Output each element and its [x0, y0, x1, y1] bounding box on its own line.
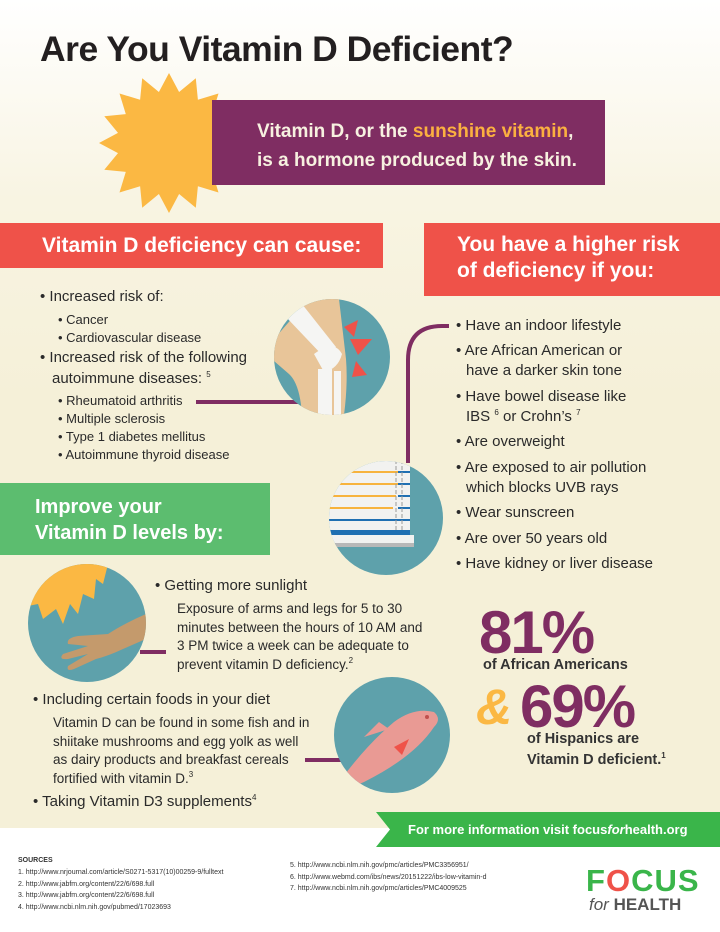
list: risk factors: • Wear sunscreen — [456, 504, 574, 521]
sources: 6. http://www.webmd.com/ibs/news/20151222/ibs-low-vitamin-d — [290, 874, 486, 880]
list: causes: • Rheumatoid arthritis — [58, 393, 182, 408]
banner: more info — [376, 812, 720, 847]
purple intro box: Vitamin D, or the sunshine vitamin, — [257, 121, 573, 142]
text: sunlight: • Getting more sunlight — [155, 577, 307, 594]
text: foods: Vitamin D can be found in some fish and in — [53, 715, 309, 730]
text: sunlight: prevent vitamin D deficiency.2 — [177, 656, 353, 672]
list: causes — [40, 288, 247, 462]
text: foods — [33, 691, 309, 810]
sources: 3. http://www.jabfm.org/content/22/6/698.full — [18, 892, 154, 899]
sources: 7. http://www.ncbi.nlm.nih.gov/pmc/articles/PMC4009525 — [290, 885, 467, 892]
list: risk factors: • Are exposed to air pollution — [456, 459, 646, 476]
icon: sun — [99, 73, 218, 213]
stats: 69% — [520, 673, 634, 740]
heading: higher risk: You have a higher risk — [457, 233, 680, 256]
logo: for HEALTH — [589, 895, 681, 914]
logo: FOCUS — [586, 863, 700, 898]
heading: higher risk: of deficiency if you: — [457, 259, 654, 282]
stats: Vitamin D deficient.1 — [527, 751, 666, 768]
title: Are You Vitamin D Deficient? — [40, 29, 513, 69]
banner: more info: For more information visit focusforhealth.org — [408, 822, 688, 837]
list: causes: • Autoimmune thyroid disease — [58, 447, 229, 462]
list: causes: • Increased risk of: — [40, 288, 164, 305]
list: risk factors: • Have bowel disease like — [456, 388, 626, 405]
text: foods: shiitake mushrooms and egg yolk as well — [53, 734, 298, 748]
text: foods: fortified with vitamin D.3 — [53, 770, 193, 786]
text: foods: • Including certain foods in your diet — [33, 691, 270, 708]
list: risk factors: • Have an indoor lifestyle — [456, 317, 621, 334]
list: causes: • Type 1 diabetes mellitus — [58, 429, 205, 444]
list: causes: • Multiple sclerosis — [58, 411, 165, 426]
sources: 1. http://www.nrjournal.com/article/S0271-5317(10)00259-9/fulltext — [18, 869, 223, 876]
purple intro box — [212, 100, 605, 185]
sources: 2. http://www.jabfm.org/content/22/6/698.full — [18, 880, 154, 888]
text: foods: • Taking Vitamin D3 supplements4 — [33, 793, 256, 810]
text: sunlight — [155, 577, 422, 672]
list: risk factors: • Are over 50 years old — [456, 530, 607, 547]
list: causes: • Increased risk of the following — [40, 349, 247, 366]
list: causes: • Cardiovascular disease — [58, 330, 201, 345]
list: risk factors — [456, 317, 653, 572]
purple intro box: is a hormone produced by the skin. — [257, 150, 577, 171]
text: sunlight: 3 PM twice a week can be adequate to — [177, 638, 409, 653]
icon: knee — [274, 299, 390, 415]
heading: improve: Improve your — [35, 496, 162, 518]
stats — [476, 599, 666, 768]
stats: 81% — [479, 599, 593, 666]
list: risk factors: • Have kidney or liver disease — [456, 555, 653, 572]
icon: window blinds — [329, 461, 443, 575]
text: sunlight: minutes between the hours of 10 AM and — [177, 620, 422, 634]
logo — [586, 863, 700, 914]
heading: higher risk — [424, 223, 720, 296]
list: risk factors: have a darker skin tone — [466, 362, 622, 379]
heading: can cause — [0, 223, 383, 268]
stats: of African Americans — [483, 657, 628, 673]
sources: 4. http://www.ncbi.nlm.nih.gov/pubmed/17023693 — [18, 904, 171, 910]
icon: fish — [334, 677, 450, 793]
list: risk factors: IBS 6 or Crohn’s 7 — [466, 408, 581, 425]
icon: sun and hand — [28, 564, 146, 682]
list: causes: • Cancer — [58, 312, 108, 327]
list: causes: autoimmune diseases: 5 — [52, 370, 211, 387]
sources — [18, 857, 486, 910]
stats: of Hispanics are — [527, 731, 639, 747]
heading: can cause: Vitamin D deficiency can cause: — [42, 234, 361, 257]
heading: improve — [0, 483, 270, 555]
stats: & — [476, 679, 512, 735]
list: risk factors: which blocks UVB rays — [466, 479, 619, 496]
heading: improve: Vitamin D levels by: — [35, 522, 224, 544]
sources: 5. http://www.ncbi.nlm.nih.gov/pmc/articles/PMC3356951/ — [290, 862, 469, 869]
list: risk factors: • Are overweight — [456, 433, 565, 450]
sources: SOURCES — [18, 857, 53, 864]
text: foods: as dairy products and breakfast cereals — [53, 752, 289, 767]
list: risk factors: • Are African American or — [456, 342, 622, 359]
text: sunlight: Exposure of arms and legs for 5 to 30 — [177, 601, 402, 616]
